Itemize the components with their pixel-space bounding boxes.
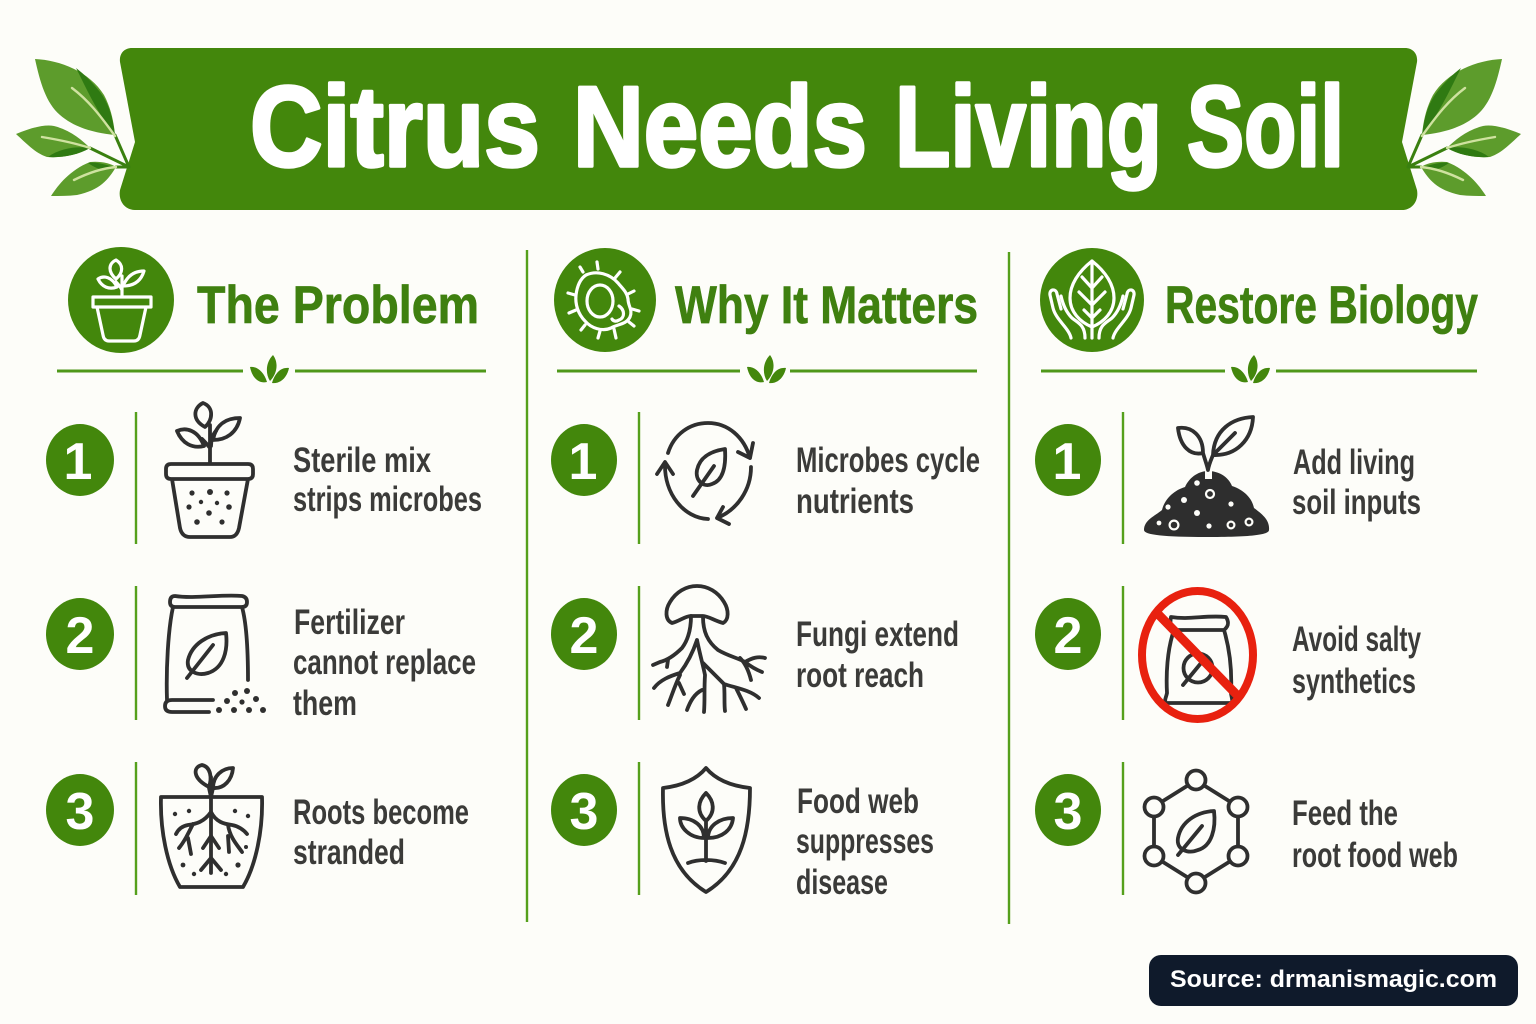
column divider right xyxy=(1008,252,1010,924)
source badge: Source: drmanismagic.com xyxy=(1170,966,1497,993)
text: avoid salty xyxy=(1292,620,1421,701)
icon: fertilizer bag xyxy=(165,596,266,713)
icon: shield with plant xyxy=(663,768,750,892)
number badge 3 xyxy=(46,774,114,846)
item 3 xyxy=(1035,762,1458,895)
number badge 2: 2 xyxy=(1054,607,1082,665)
heading rule with sprig xyxy=(1041,355,1477,383)
text: fungi: Fungi extend xyxy=(796,615,959,654)
icon: living soil mound xyxy=(1144,417,1269,537)
title: Soil xyxy=(1187,64,1344,191)
icon: left leaves xyxy=(16,59,129,196)
number badge 2 xyxy=(551,598,617,670)
icon: stranded roots xyxy=(161,765,262,887)
text: fertilizer: cannot replace xyxy=(293,643,476,682)
number badge 2 xyxy=(46,598,114,670)
number badge 3: 3 xyxy=(570,783,598,841)
text: feed: root food web xyxy=(1292,836,1458,875)
item 2 xyxy=(46,586,476,723)
heading rule with sprig xyxy=(557,355,977,383)
text: roots xyxy=(293,793,469,872)
number badge 1: 1 xyxy=(1053,433,1081,491)
text: food web: suppresses xyxy=(796,822,934,861)
text: add living xyxy=(1292,443,1421,522)
text: food web: disease xyxy=(796,863,888,902)
icon: nutrient cycle xyxy=(657,423,753,524)
number badge 1: 1 xyxy=(64,433,92,491)
icon: pot with sterile mix xyxy=(166,403,253,537)
item 1 xyxy=(551,412,980,544)
item 1 xyxy=(1035,412,1421,544)
title xyxy=(250,64,1344,191)
text: sterile mix: strips microbes xyxy=(293,480,482,519)
number badge 3 xyxy=(1035,774,1101,846)
text: fertilizer: Fertilizer xyxy=(294,603,405,642)
text: roots: stranded xyxy=(293,833,405,872)
text: microbes: Microbes cycle xyxy=(796,441,980,480)
item 3 xyxy=(551,762,934,902)
number badge 1 xyxy=(551,424,617,496)
icon: mushroom and roots xyxy=(653,586,765,712)
heading: why it matters: Why It Matters xyxy=(675,276,978,335)
text: add living: Add living xyxy=(1293,443,1415,482)
number badge 3: 3 xyxy=(1054,783,1082,841)
number badge 3: 3 xyxy=(66,783,94,841)
number badge 3 xyxy=(551,774,617,846)
text: food web: Food web xyxy=(797,782,919,821)
number badge 2 xyxy=(1035,598,1101,670)
text: food web xyxy=(796,782,934,902)
icon: no synthetic fertilizer xyxy=(1142,591,1253,719)
item 2 xyxy=(1035,586,1421,720)
icon: hands holding leaf badge xyxy=(1040,248,1144,352)
icon: microbe badge xyxy=(554,248,656,352)
text: feed xyxy=(1292,794,1458,875)
text: fungi: root reach xyxy=(796,656,924,695)
text: roots: Roots become xyxy=(293,793,469,832)
title banner xyxy=(120,48,1417,210)
icon: potted plant badge xyxy=(68,247,174,353)
icon: food web network xyxy=(1144,770,1248,892)
panel: why it matters xyxy=(551,248,980,902)
number badge 1 xyxy=(46,424,114,496)
text: avoid salty: Avoid salty xyxy=(1292,620,1421,659)
column divider left xyxy=(526,250,528,922)
item 3 xyxy=(46,762,469,895)
title: Living xyxy=(895,64,1162,191)
source badge xyxy=(1149,955,1518,1006)
icon: right leaves xyxy=(1408,59,1521,196)
number badge 2: 2 xyxy=(66,607,94,665)
text: fungi xyxy=(796,615,959,695)
text: fertilizer: them xyxy=(293,684,357,723)
text: sterile mix xyxy=(293,441,482,519)
heading rule with sprig xyxy=(57,355,486,383)
number badge 1 xyxy=(1035,424,1101,496)
number badge 2: 2 xyxy=(570,607,598,665)
item 1 xyxy=(46,403,482,544)
panel: the problem xyxy=(46,247,486,895)
item 2 xyxy=(551,586,959,720)
text: add living: soil inputs xyxy=(1292,483,1421,522)
text: sterile mix: Sterile mix xyxy=(293,441,431,480)
text: feed: Feed the xyxy=(1292,794,1398,833)
text: microbes: nutrients xyxy=(796,482,914,521)
title: Needs xyxy=(573,64,867,191)
text: fertilizer xyxy=(293,603,476,723)
title: Citrus xyxy=(250,64,540,191)
number badge 1: 1 xyxy=(569,433,597,491)
heading: the problem: The Problem xyxy=(197,276,479,335)
text: microbes xyxy=(796,441,980,521)
panel: restore biology xyxy=(1035,248,1478,895)
text: avoid salty: synthetics xyxy=(1292,662,1416,701)
